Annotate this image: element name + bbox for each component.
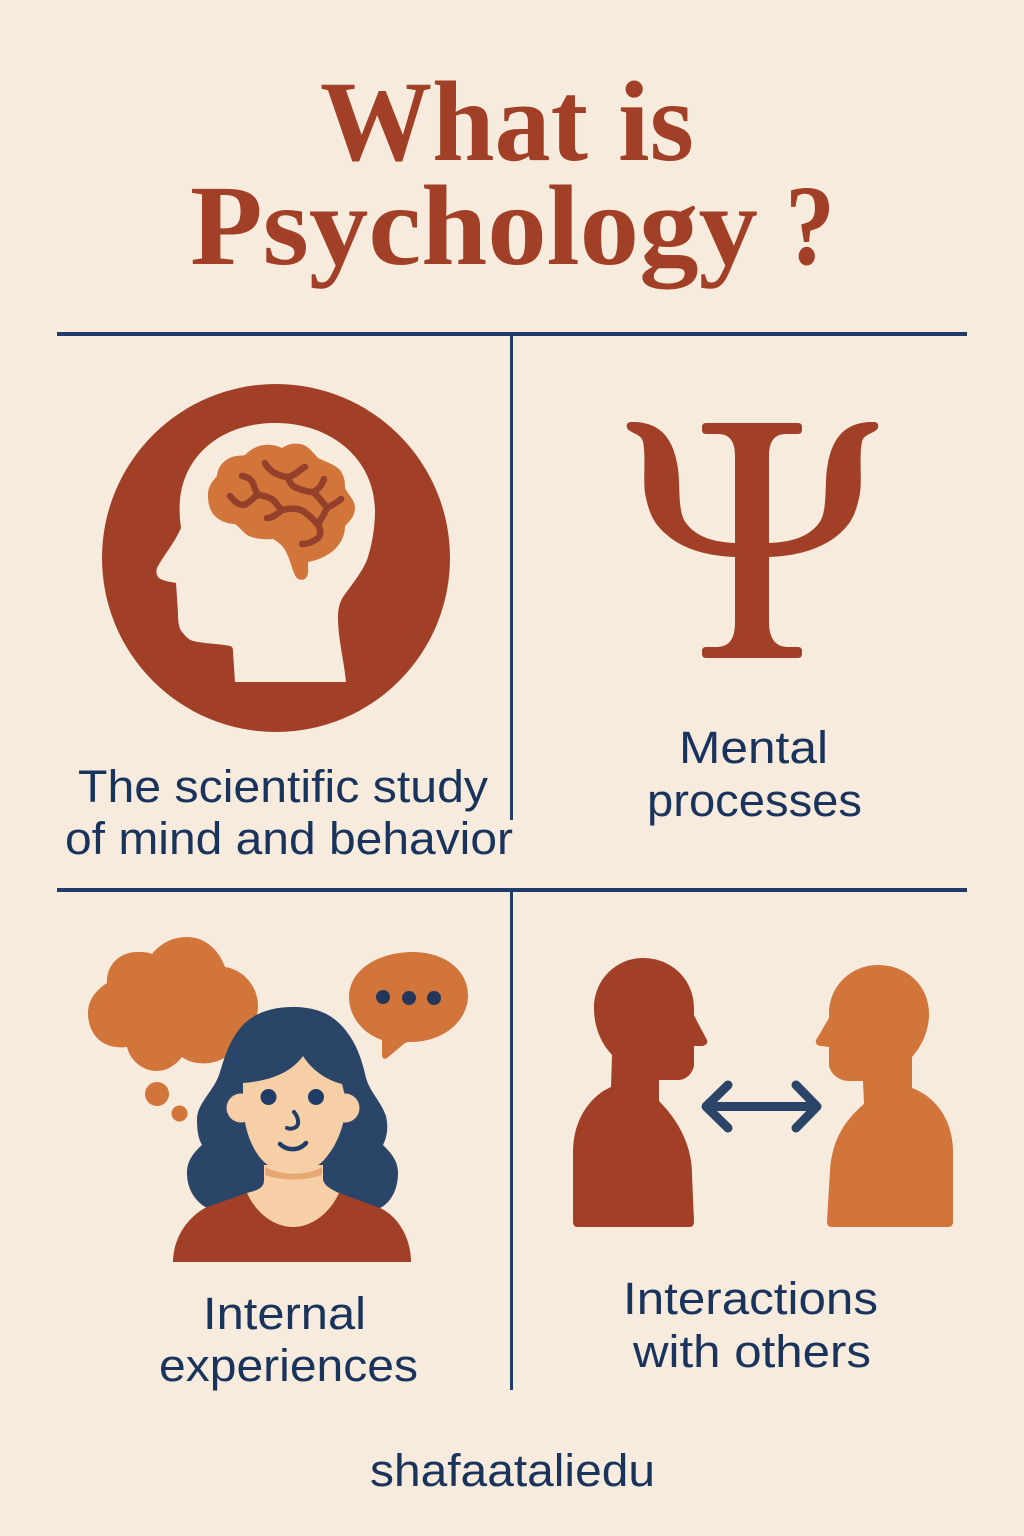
panel: interactions — [573, 958, 953, 1377]
panel: internal experiences: experiences — [159, 1340, 418, 1391]
icon: psi symbol — [627, 422, 878, 658]
panel: internal experiences — [88, 937, 468, 1391]
icon: right person — [816, 965, 953, 1227]
panel: definition — [65, 384, 513, 864]
panel: mental processes: processes — [647, 775, 862, 826]
icon: speech bubble — [349, 952, 468, 1059]
title: is — [618, 58, 694, 185]
icon: woman — [173, 1007, 411, 1262]
icon: thought cloud — [88, 937, 258, 1122]
title: Psychology — [190, 162, 758, 289]
caption: Interactions — [623, 1273, 878, 1324]
caption: The scientific study — [78, 761, 489, 812]
footer credit: shafaataliedu — [370, 1445, 655, 1496]
caption: Internal — [203, 1288, 366, 1339]
panel: interactions: with others — [632, 1326, 871, 1377]
panel: definition: of mind and behavior — [65, 813, 513, 864]
title: What — [320, 58, 588, 185]
caption: Mental — [679, 722, 828, 773]
icon: brain — [208, 444, 355, 580]
icon: two-way arrow — [706, 1085, 817, 1128]
title: ? — [785, 162, 835, 289]
icon: left person — [573, 958, 707, 1227]
title — [190, 58, 835, 289]
icon: head with brain — [102, 384, 450, 732]
panel: mental processes — [627, 422, 878, 826]
